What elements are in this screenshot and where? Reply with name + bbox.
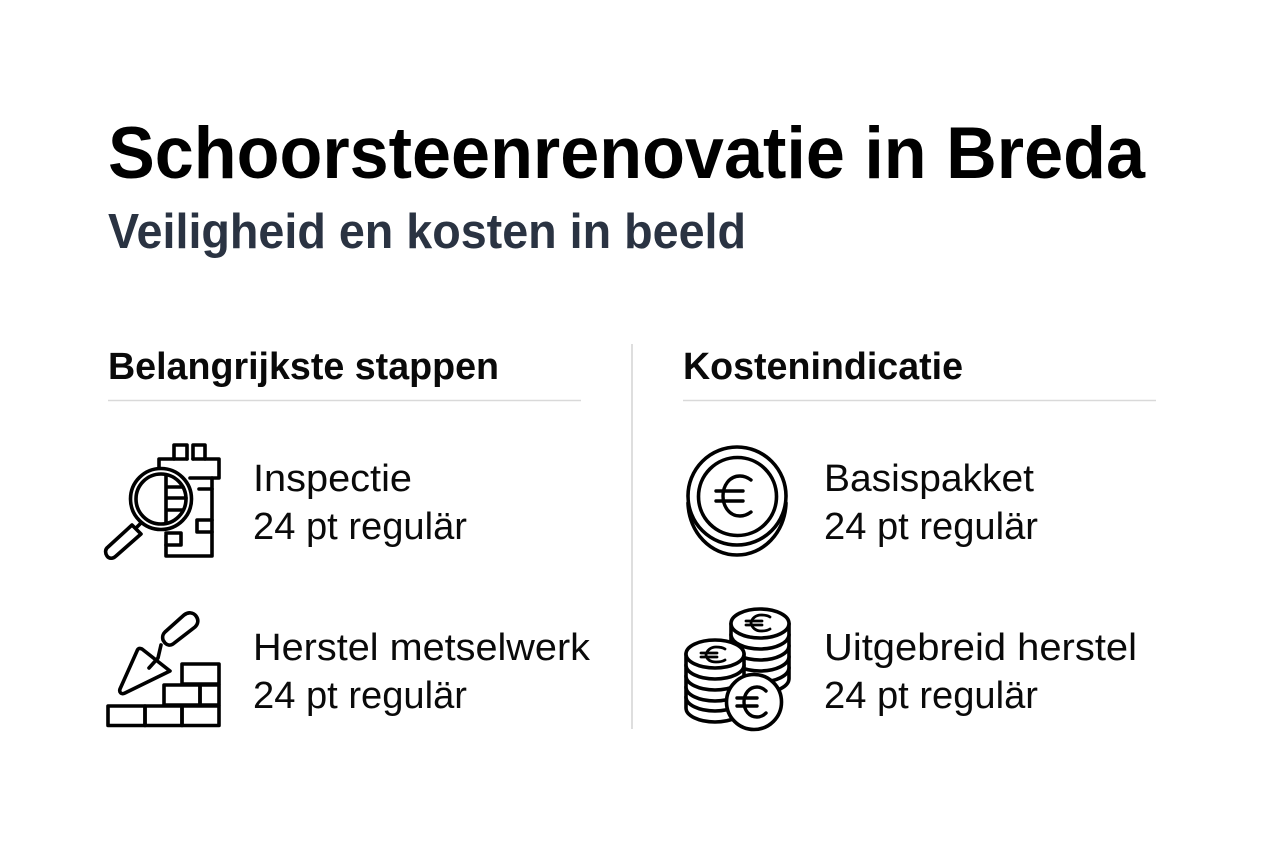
text: herstel metselwerk: Herstel metselwerk <box>253 627 591 669</box>
text: basispakket <box>824 458 1038 548</box>
heading: belangrijkste stappen: Belangrijkste stappen <box>108 346 499 388</box>
text: inspectie <box>253 458 467 548</box>
panel: belangrijkste stappen <box>106 346 591 726</box>
icon: chimney inspection <box>106 445 219 558</box>
text: inspectie: Inspectie <box>253 458 412 500</box>
text: basispakket: 24 pt regulär <box>824 506 1038 548</box>
text: inspectie: 24 pt regulär <box>253 506 467 548</box>
text: herstel metselwerk <box>253 627 591 717</box>
text: herstel metselwerk: 24 pt regulär <box>253 675 467 717</box>
panel: kostenindicatie <box>683 346 1156 730</box>
text: uitgebreid herstel <box>824 627 1137 717</box>
text: uitgebreid herstel: 24 pt regulär <box>824 675 1038 717</box>
subtitle: Veiligheid en kosten in beeld <box>108 205 746 259</box>
text: uitgebreid herstel: Uitgebreid herstel <box>824 627 1137 669</box>
icon: single euro coin <box>688 447 786 555</box>
title: Schoorsteenrenovatie in Breda <box>108 113 1146 194</box>
icon: stacks of euro coins <box>686 609 789 730</box>
icon: trowel and bricks <box>108 613 219 726</box>
text: basispakket: Basispakket <box>824 458 1034 500</box>
heading: kostenindicatie: Kostenindicatie <box>683 346 963 388</box>
